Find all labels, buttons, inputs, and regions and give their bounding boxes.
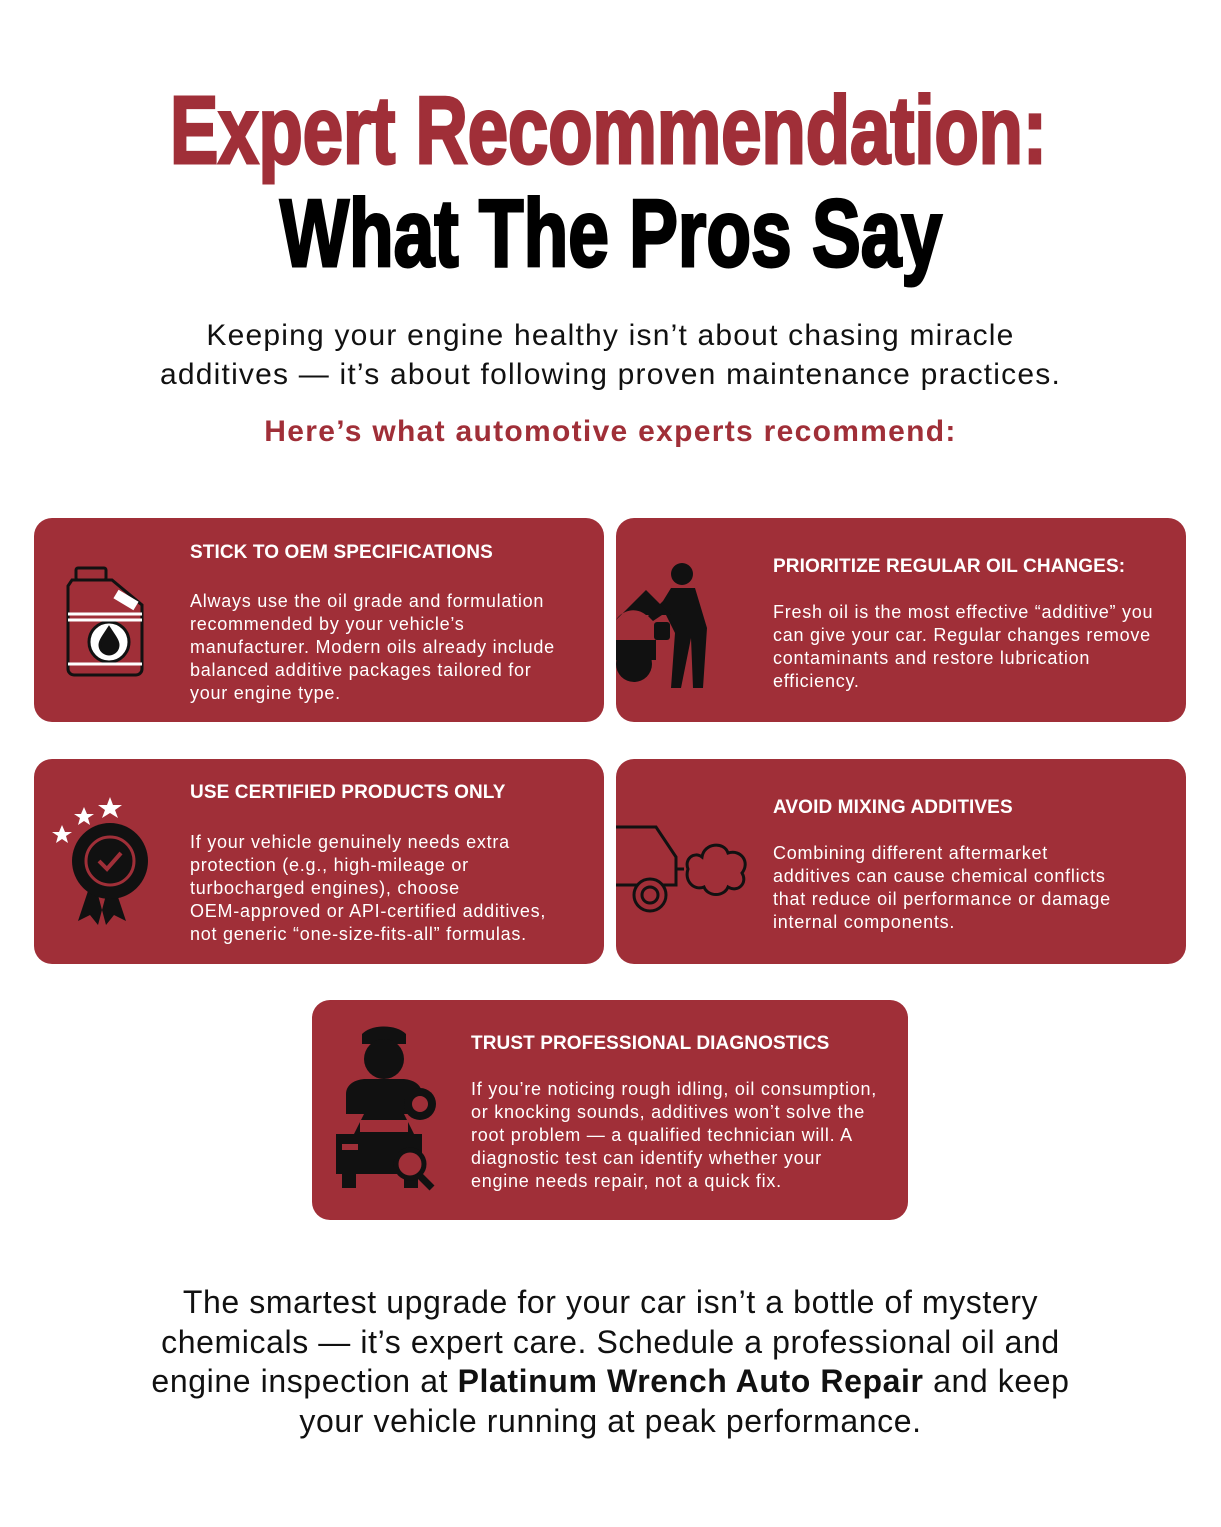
body: [773, 602, 1153, 691]
panel: stick to OEM: [34, 518, 604, 722]
title: What The Pros Say: [280, 180, 942, 287]
body: efficiency.: [773, 671, 860, 691]
body: If you’re noticing rough idling, oil consumption,: [471, 1079, 877, 1099]
body: OEM-approved or API-certified additives,: [190, 901, 546, 921]
body: balanced additive packages tailored for: [190, 660, 531, 680]
icon: award badge: [52, 797, 148, 925]
body: engine needs repair, not a quick fix.: [471, 1171, 782, 1191]
heading: STICK TO OEM SPECIFICATIONS: [190, 542, 493, 563]
body: your engine type.: [190, 683, 341, 703]
panel: oil changes: [616, 518, 1186, 722]
heading: PRIORITIZE REGULAR OIL CHANGES:: [773, 556, 1125, 577]
body: manufacturer. Modern oils already include: [190, 637, 555, 657]
body: turbocharged engines), choose: [190, 878, 460, 898]
body: internal components.: [773, 912, 955, 932]
body: additives can cause chemical conflicts: [773, 866, 1106, 886]
body: [471, 1079, 877, 1191]
intro text: Keeping your engine healthy isn’t about chasing miracle: [206, 319, 1015, 352]
footer text: engine inspection at Platinum Wrench Auto Repair and keep: [151, 1363, 1070, 1399]
body: Fresh oil is the most effective “additive” you: [773, 602, 1153, 622]
panel: avoid mixing: [616, 759, 1186, 964]
body: diagnostic test can identify whether your: [471, 1148, 822, 1168]
icon: mechanic: [616, 563, 707, 688]
body: [773, 843, 1111, 932]
body: [190, 591, 555, 703]
body: root problem — a qualified technician will. A: [471, 1125, 853, 1145]
icon: car exhaust: [616, 826, 747, 912]
body: that reduce oil performance or damage: [773, 889, 1111, 909]
body: contaminants and restore lubrication: [773, 648, 1090, 668]
body: can give your car. Regular changes remove: [773, 625, 1151, 645]
footer text: [151, 1284, 1070, 1438]
icon: technician with car: [336, 1026, 436, 1190]
body: [190, 832, 546, 944]
intro text: additives — it’s about following proven maintenance practices.: [160, 358, 1061, 391]
heading: TRUST PROFESSIONAL DIAGNOSTICS: [471, 1033, 829, 1054]
body: recommended by your vehicle’s: [190, 614, 465, 634]
heading: USE CERTIFIED PRODUCTS ONLY: [190, 782, 506, 803]
heading: AVOID MIXING ADDITIVES: [773, 797, 1013, 818]
footer text: The smartest upgrade for your car isn’t a bottle of mystery: [183, 1284, 1038, 1320]
footer text: your vehicle running at peak performance.: [299, 1402, 922, 1438]
body: If your vehicle genuinely needs extra: [190, 832, 510, 852]
body: or knocking sounds, additives won’t solve the: [471, 1102, 865, 1122]
body: not generic “one-size-fits-all” formulas.: [190, 924, 527, 944]
panel: diagnostics: [312, 1000, 908, 1220]
body: Always use the oil grade and formulation: [190, 591, 544, 611]
icon: oil jug: [66, 566, 144, 676]
panel: certified products: [34, 759, 604, 964]
footer text: chemicals — it’s expert care. Schedule a professional oil and: [161, 1324, 1060, 1360]
title: [170, 77, 1047, 288]
body: protection (e.g., high-mileage or: [190, 855, 469, 875]
intro text: [160, 319, 1061, 391]
body: Combining different aftermarket: [773, 843, 1048, 863]
subheading: Here’s what automotive experts recommend:: [264, 415, 957, 448]
